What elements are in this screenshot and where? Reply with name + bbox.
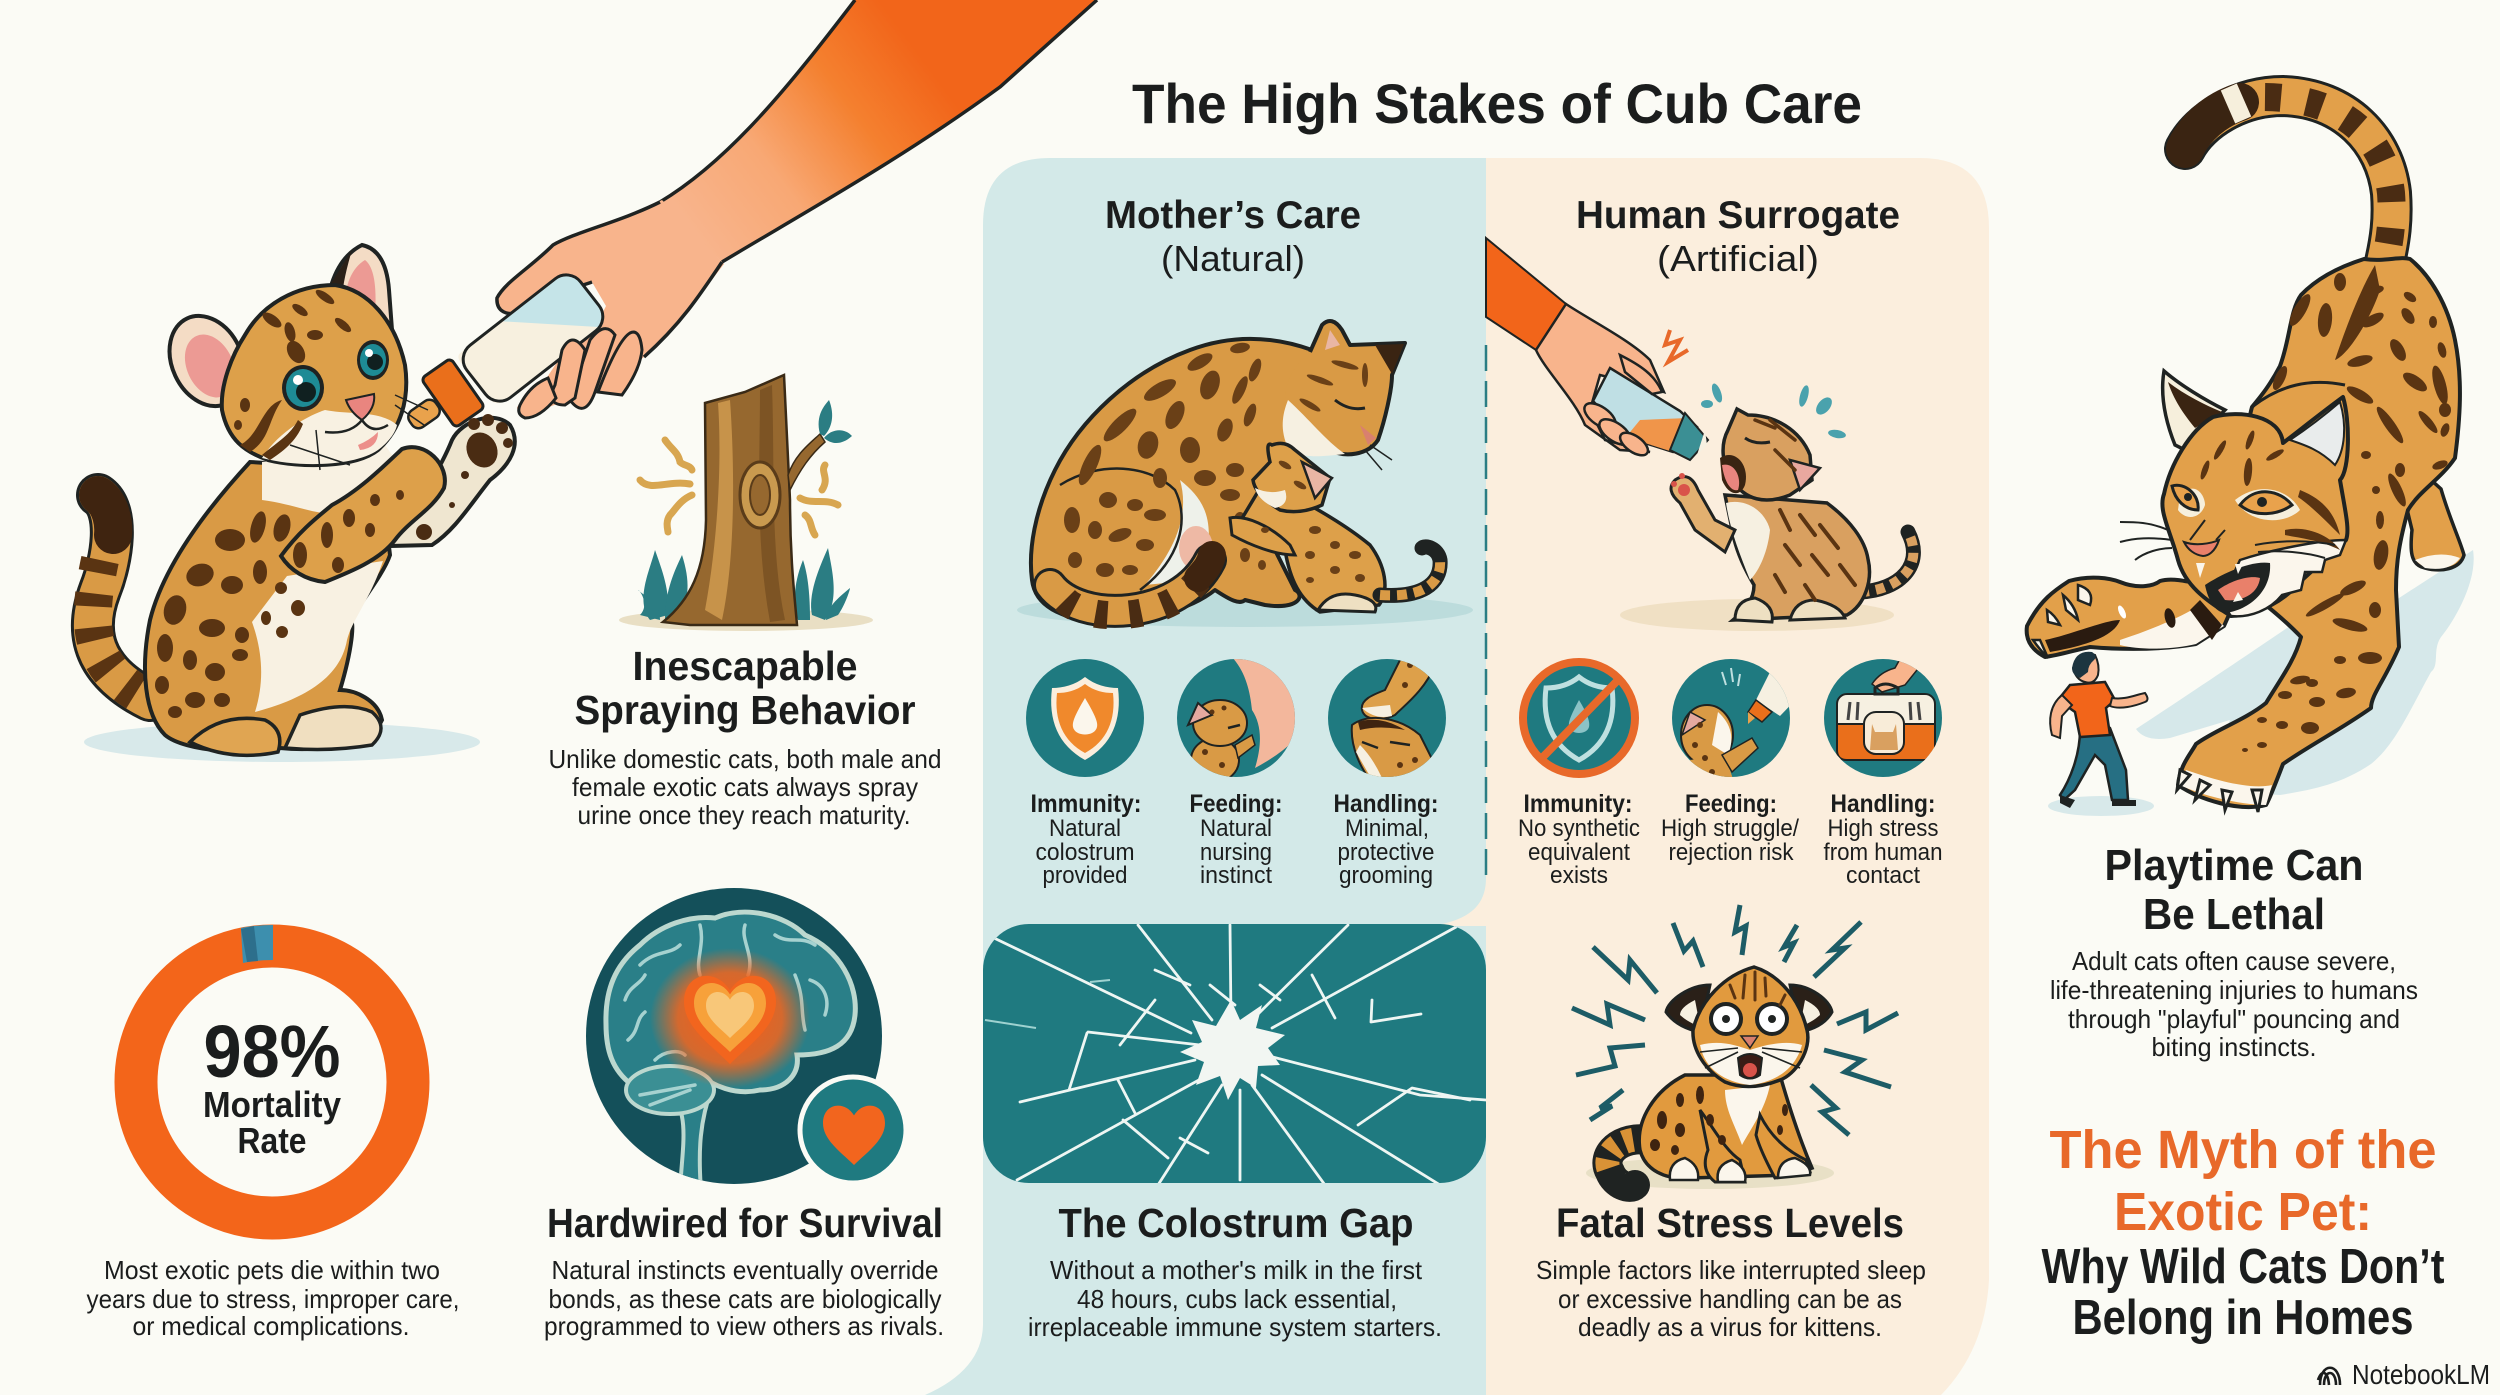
illustration: cub drinking from bottle (84, 245, 515, 762)
cub head (1253, 443, 1330, 512)
belly (252, 561, 383, 712)
heading (574, 643, 916, 733)
claws (2033, 585, 2091, 658)
text block: mortality description: or medical complications. (132, 1311, 410, 1341)
person (2048, 652, 2154, 816)
whiskers (2120, 522, 2335, 560)
heading: Spraying Behavior (574, 687, 916, 733)
grass (638, 548, 850, 620)
heading: mother's care: Mother’s Care (1105, 194, 1361, 237)
text block: playtime can be lethal: Playtime Can (2104, 841, 2364, 890)
label: feeding: nursing (1200, 839, 1272, 866)
branch and leaves (788, 434, 825, 490)
heading: human surrogate (1576, 194, 1900, 279)
body text: Unlike domestic cats, both male and (548, 744, 942, 774)
stress bolts (1572, 905, 1898, 1135)
body text (2050, 946, 2418, 1062)
center divider (1485, 345, 1487, 885)
body text: or excessive handling can be as (1558, 1284, 1902, 1314)
muzzle (262, 410, 397, 464)
text block: colostrum gap (1028, 1200, 1442, 1342)
body text (1536, 1255, 1926, 1342)
text block: hardwired for survival (544, 1200, 944, 1341)
body (2178, 258, 2460, 807)
label: feeding: Feeding: (1685, 790, 1777, 818)
fingers (519, 329, 642, 418)
body text: programmed to view others as rivals. (544, 1311, 944, 1341)
heading: mother's care: (Natural) (1161, 238, 1305, 279)
legs (1700, 1110, 1745, 1182)
icon: immunity shield (1026, 659, 1144, 777)
forearm (281, 447, 445, 582)
text block: playtime can be lethal: Be Lethal (2143, 890, 2325, 939)
label: immunity: Natural (1049, 815, 1121, 842)
cub tail (1380, 547, 1440, 595)
nose (2184, 540, 2219, 556)
mother body (1031, 339, 1330, 620)
stat label: Rate (238, 1120, 306, 1161)
front paw toes (2180, 770, 2272, 805)
stat label: Mortality (203, 1084, 341, 1125)
back ear side (2252, 382, 2345, 407)
text block: playtime can be lethal (2050, 841, 2418, 1062)
hand (1536, 304, 1664, 452)
body (145, 462, 390, 752)
illustration: sprayed tree (619, 375, 873, 631)
label: handling: from human (1824, 839, 1942, 866)
right ear inner (2290, 402, 2344, 465)
face patches (2178, 489, 2205, 517)
tail (1607, 1139, 1650, 1187)
label: feeding: Feeding: (1190, 790, 1282, 818)
text block: fatal stress levels: Fatal Stress Levels (1556, 1200, 1904, 1246)
label: handling: contact (1846, 862, 1920, 889)
feet (1735, 598, 1772, 622)
panel: mother's care background (925, 158, 1486, 1395)
body spots (2242, 265, 2451, 752)
text block: fatal stress levels (1536, 1200, 1926, 1342)
bottle (1593, 368, 1697, 452)
icon: brain with heart (586, 888, 906, 1190)
label: feeding: rejection risk (1668, 839, 1794, 866)
icons: human surrogate trio (1519, 658, 1942, 778)
text block: hardwired for survival: Hardwired for Survival (547, 1200, 943, 1246)
ground shadow (1586, 1157, 1834, 1189)
body text: Natural instincts eventually override (552, 1255, 938, 1285)
body (1639, 1075, 1812, 1178)
main title block: Belong in Homes (2072, 1291, 2414, 1345)
heading: Inescapable (632, 643, 858, 689)
text block: mortality description: years due to stress, improper care, (86, 1284, 460, 1314)
glowing heart (650, 948, 810, 1088)
body text: 48 hours, cubs lack essential, (1077, 1284, 1397, 1314)
ground shadow (1620, 599, 1894, 631)
stat label (203, 1084, 341, 1161)
ground shadow (84, 722, 480, 762)
label: immunity: Immunity: (1524, 790, 1632, 818)
distress marks (1665, 330, 1688, 362)
icons: mother's care trio (1026, 659, 1446, 777)
spots (1650, 1086, 1788, 1155)
face markings (234, 287, 353, 460)
icon: nursing cub (1177, 659, 1295, 777)
label: feeding: High struggle/ (1661, 815, 1799, 842)
heading: human surrogate: (Artificial) (1657, 238, 1819, 279)
belly (1145, 480, 1209, 585)
body text: life-threatening injuries to humans (2050, 975, 2418, 1005)
face marks (2199, 430, 2340, 550)
body text: Simple factors like interrupted sleep (1536, 1255, 1926, 1285)
small heart badge (800, 1077, 906, 1183)
body text: urine once they reach maturity. (578, 800, 910, 830)
feet (190, 718, 280, 755)
label: handling: protective (1338, 839, 1434, 866)
body text: bonds, as these cats are biologically (548, 1284, 942, 1314)
eyes (2172, 485, 2198, 510)
mother spots (1064, 341, 1271, 577)
illustration: shattered glass (983, 924, 1486, 1185)
cub arm (1671, 477, 1735, 552)
icon: grooming paw (1328, 659, 1446, 777)
sleeve (1486, 238, 1566, 350)
body text: Adult cats often cause severe, (2072, 946, 2396, 976)
body text: irreplaceable immune system starters. (1028, 1312, 1442, 1342)
ears (1666, 985, 1710, 1032)
label: feeding: instinct (1200, 862, 1272, 889)
illustration: arm and bottle feeding (405, 0, 1097, 431)
label: immunity: provided (1042, 862, 1128, 889)
cub stripes (1775, 510, 1855, 600)
cub body (1725, 495, 1869, 620)
spray marks (640, 440, 838, 535)
heading: mother's care (1105, 194, 1361, 279)
icon: no immunity (1522, 661, 1636, 775)
head (2162, 397, 2348, 616)
label: immunity: No synthetic (1518, 815, 1640, 842)
panel: human surrogate background (1486, 158, 1989, 1395)
chart: mortality donut (136, 925, 408, 1218)
label: handling (1334, 790, 1438, 889)
label: handling: Handling: (1334, 790, 1438, 818)
stat: 98% (204, 1010, 340, 1093)
label: immunity (1518, 790, 1640, 889)
left ear (2163, 371, 2225, 450)
body text: deadly as a virus for kittens. (1578, 1312, 1882, 1342)
label: immunity: exists (1550, 862, 1608, 889)
shadow (2136, 550, 2474, 795)
label: handling (1824, 790, 1942, 889)
cub spots (1261, 459, 1365, 583)
chest (262, 445, 410, 514)
label: handling: grooming (1339, 862, 1433, 889)
open mouth (2205, 563, 2270, 613)
text block: mortality description (86, 1255, 460, 1341)
tail (1050, 555, 1212, 615)
eyes (282, 365, 324, 411)
raised leg (389, 418, 515, 546)
main title block: Exotic Pet: (2114, 1182, 2372, 1242)
fingers (1580, 355, 1662, 460)
text block: colostrum gap: The Colostrum Gap (1058, 1200, 1414, 1246)
label: immunity (1030, 790, 1142, 889)
illustration: pouncing adult cat and person (2027, 96, 2474, 816)
arm (2027, 578, 2240, 657)
label: feeding: Natural (1200, 815, 1272, 842)
hind leg (2400, 470, 2464, 570)
cub tail (1860, 532, 1913, 592)
body text: biting instincts. (2152, 1032, 2316, 1062)
head (1693, 967, 1808, 1087)
label: handling: Minimal, (1345, 815, 1429, 842)
illustration: hand forcing bottle on cub (1486, 238, 1913, 631)
body text: through "playful" pouncing and (2068, 1004, 2400, 1034)
illustration: mother cat grooming cub (1017, 321, 1473, 627)
eyes (1711, 1004, 1741, 1034)
knot (740, 462, 780, 528)
cub body (1235, 480, 1385, 612)
label: feeding (1190, 790, 1282, 889)
text block: inescapable spraying behavior (548, 643, 942, 830)
illustration: stressed kitten (1572, 905, 1898, 1189)
label: immunity: colostrum (1036, 839, 1134, 866)
label: handling: Handling: (1830, 790, 1936, 818)
nose (346, 394, 374, 420)
whiskers (1700, 1048, 1802, 1068)
nose and mouth (1741, 1036, 1758, 1048)
peach notch (1432, 878, 1486, 926)
whiskers (290, 395, 428, 470)
label: feeding (1661, 790, 1799, 866)
main title block (2042, 1120, 2444, 1345)
mother head (1285, 321, 1405, 454)
ears (155, 304, 259, 418)
trunk (663, 375, 797, 625)
spots: body (155, 490, 404, 718)
main title block: The Myth of the (2050, 1120, 2436, 1180)
text: human surrogate labels (1518, 790, 1942, 889)
body text (544, 1255, 944, 1341)
body text (1028, 1255, 1442, 1342)
forehead stripes (1730, 972, 1785, 1005)
icon: struggling cub bottle (1672, 659, 1790, 777)
label: handling: High stress (1828, 815, 1938, 842)
ground (619, 609, 873, 631)
tail (93, 495, 150, 700)
icon: carrier (1824, 650, 1942, 777)
body text (548, 744, 942, 830)
text block: mortality description: Most exotic pets die within two (104, 1255, 440, 1285)
title: The High Stakes of Cub Care (1132, 72, 1862, 135)
white cheek ruff (2227, 540, 2346, 616)
heading: human surrogate: Human Surrogate (1576, 194, 1900, 237)
bottle (405, 268, 610, 431)
cub head (1723, 409, 1812, 500)
head (222, 285, 406, 465)
body text: female exotic cats always spray (572, 772, 918, 802)
label: immunity: Immunity: (1030, 790, 1142, 818)
label: immunity: equivalent (1528, 839, 1630, 866)
text: mother's care labels (1030, 790, 1438, 889)
body text: Without a mother's milk in the first (1050, 1255, 1423, 1285)
tail (2185, 96, 2392, 262)
